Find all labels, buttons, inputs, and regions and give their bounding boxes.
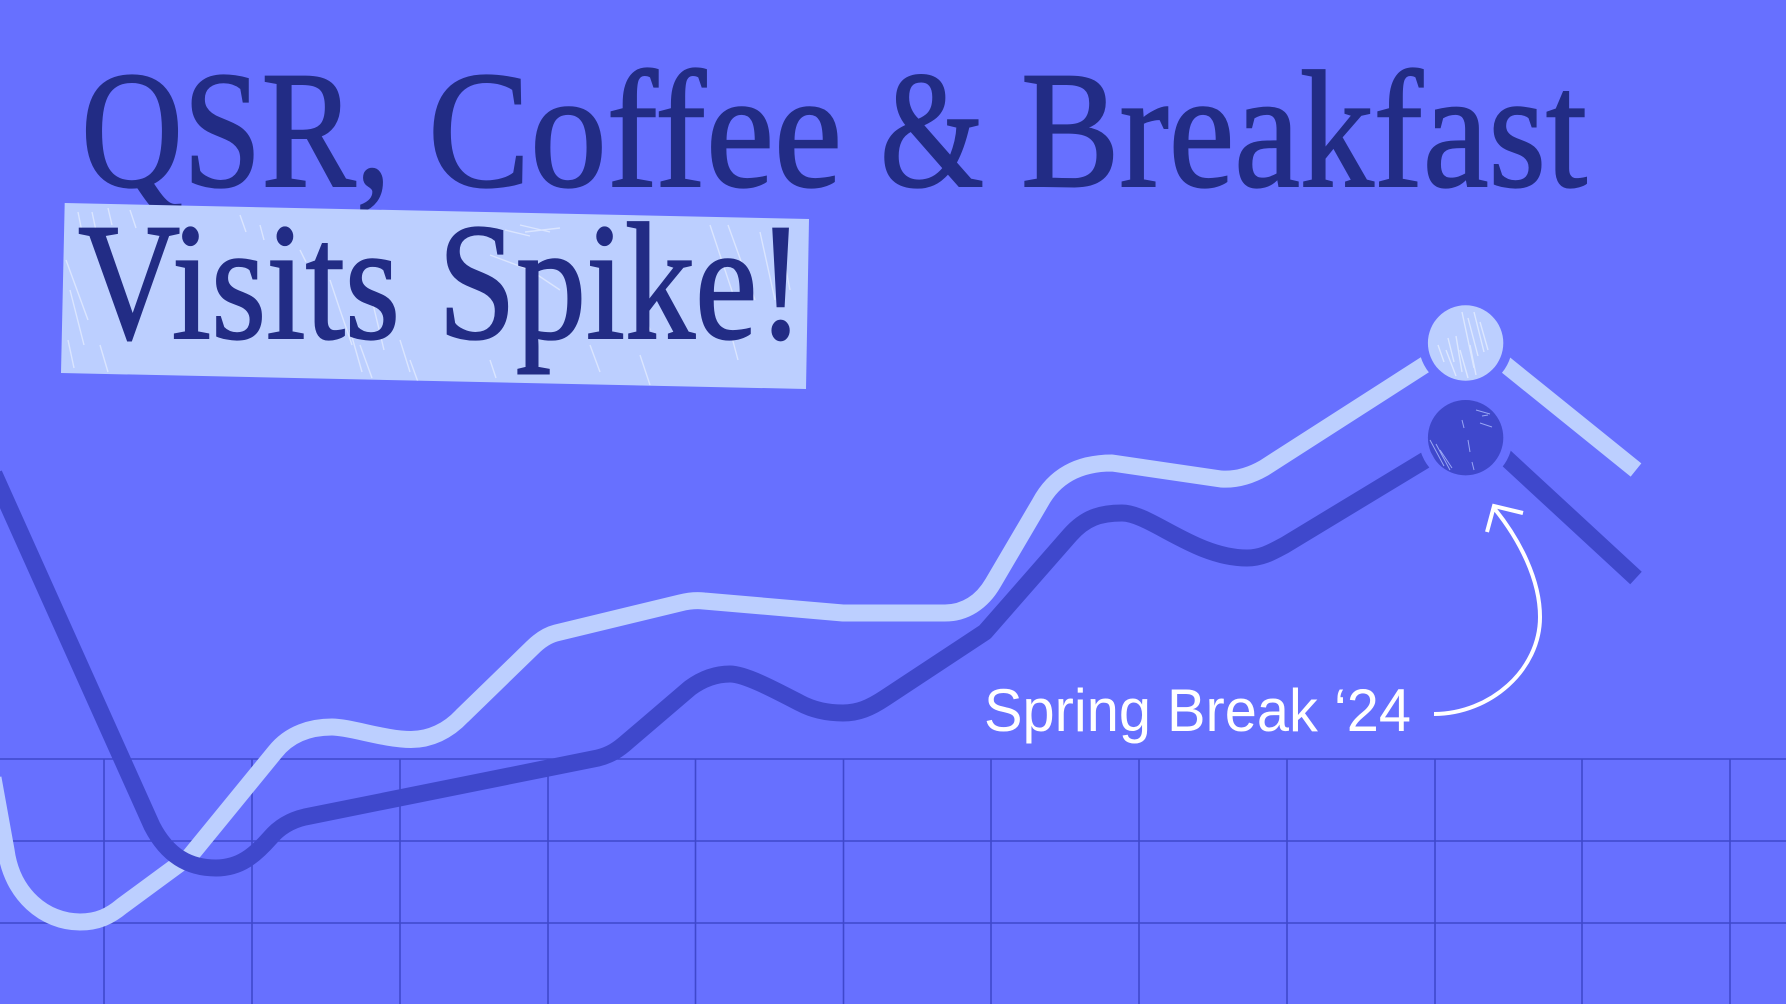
highlight scratches (66, 208, 790, 385)
highlight panel (61, 203, 809, 389)
marker: light peak (1428, 305, 1503, 381)
title line two: Spike! (438, 190, 804, 375)
chart grid (0, 759, 1786, 1004)
title line one: & (880, 38, 984, 223)
line: dark series (0, 420, 1636, 868)
marker: dark peak (1428, 400, 1503, 475)
title line one: Coffee (428, 38, 842, 223)
arrow: callout to marker (1434, 506, 1540, 714)
title line one: Breakfast (1021, 38, 1587, 223)
title line one (81, 38, 1587, 223)
title highlight with text (61, 190, 809, 389)
marker gap rings (1419, 296, 1513, 485)
callout label: Spring Break ‘24 (984, 677, 1411, 744)
title line two (78, 190, 804, 375)
title line two: Visits (78, 190, 400, 375)
title line one: QSR, (81, 38, 391, 223)
line: light series (0, 332, 1636, 922)
